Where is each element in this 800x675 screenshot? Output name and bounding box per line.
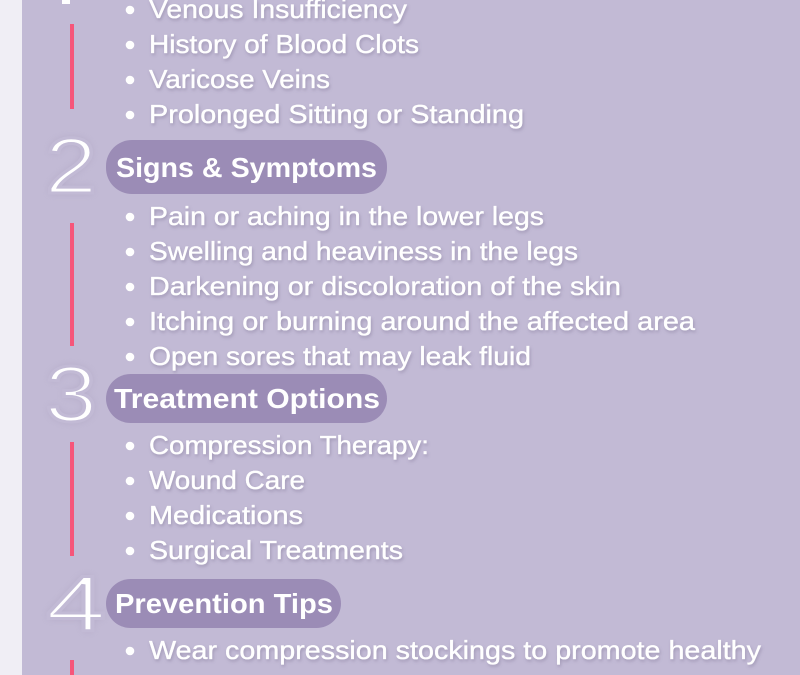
- connector line 3: [70, 442, 74, 556]
- left margin strip: [0, 0, 22, 675]
- connector line 1: [70, 24, 74, 109]
- section 2: signs and symptoms: [45, 121, 696, 371]
- list: symptoms: [126, 201, 696, 371]
- list: treatments: [126, 430, 429, 565]
- list: symptoms: Itching or burning around the affected area: [149, 306, 696, 336]
- list: risk factors: Prolonged Sitting or Standing: [149, 99, 524, 129]
- list: treatments: Compression Therapy:: [149, 430, 429, 460]
- heading pill: treatment options: [106, 374, 387, 423]
- section 4: prevention tips: [46, 559, 761, 675]
- number 3: 3: [45, 349, 97, 438]
- list: risk factors: History of Blood Clots: [149, 29, 419, 59]
- list: prevention: Wear compression stockings to promote healthy: [149, 635, 761, 665]
- list: symptoms: Swelling and heaviness in the legs: [149, 236, 578, 266]
- connector line 2: [70, 223, 74, 346]
- list: treatments: Medications: [149, 500, 303, 530]
- list: risk factors: Varicose Veins: [149, 64, 330, 94]
- number 4: 4: [46, 559, 106, 648]
- heading pill: treatment options: Treatment Options: [114, 383, 380, 414]
- section 1: risk factors: [40, 0, 524, 129]
- number 4: 4: [46, 559, 106, 648]
- number 2: 2: [45, 121, 97, 210]
- connector line 4: [70, 660, 74, 675]
- list: treatments: Wound Care: [149, 465, 305, 495]
- list: treatments: Surgical Treatments: [149, 535, 403, 565]
- number 3: 3: [45, 349, 97, 438]
- number 2: 2: [45, 121, 97, 210]
- heading pill: signs and symptoms: Signs & Symptoms: [116, 152, 377, 183]
- section 3: treatment options: [45, 349, 429, 565]
- list: symptoms: Open sores that may leak fluid: [149, 341, 531, 371]
- heading pill: prevention tips: [106, 579, 341, 628]
- list: symptoms: Pain or aching in the lower legs: [149, 201, 544, 231]
- list: risk factors: [126, 0, 524, 129]
- list: symptoms: Darkening or discoloration of the skin: [149, 271, 621, 301]
- heading pill: prevention tips: Prevention Tips: [115, 588, 333, 619]
- heading pill: signs and symptoms: [106, 140, 387, 194]
